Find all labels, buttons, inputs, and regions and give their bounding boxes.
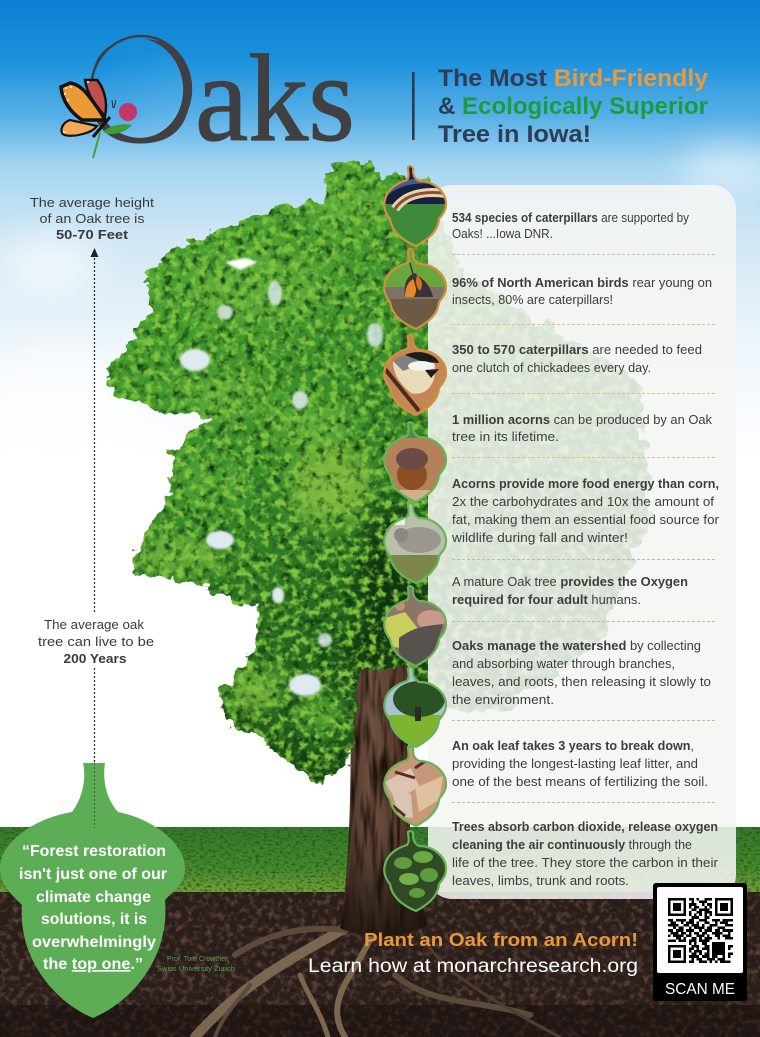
fact: carbon: leaves, limbs, trunk and roots. bbox=[452, 874, 629, 888]
quote text: climate change bbox=[36, 889, 151, 906]
fact: watershed: and absorbing water through branches, bbox=[452, 657, 675, 671]
fact: food energy: fat, making them an essential food source for bbox=[452, 513, 719, 527]
heading: tagline bbox=[438, 65, 709, 148]
heading: tagline: & Ecologically Superior bbox=[438, 93, 708, 120]
fact: carbon bbox=[452, 820, 718, 888]
icon: seedlings acorn bbox=[383, 830, 448, 912]
fact: food energy bbox=[451, 477, 719, 545]
QR modules bbox=[668, 899, 733, 962]
quote text: isn't just one of our bbox=[19, 866, 167, 883]
fact: watershed: leaves, and roots, then releasing it slowly to bbox=[452, 675, 711, 689]
fact: food energy: Acorns provide more food energy than corn, bbox=[452, 477, 719, 491]
QR label: SCAN ME bbox=[665, 981, 735, 998]
icon: squirrel acorn bbox=[383, 502, 448, 584]
divider bbox=[412, 72, 415, 140]
icon: butterfly and flower bbox=[61, 80, 137, 158]
lifespan note: 200 Years bbox=[64, 652, 127, 666]
fact: leaf litter: one of the best means of fertilizing the soil. bbox=[452, 775, 708, 789]
fact: caterpillars: 534 species of caterpillars are supported by bbox=[452, 211, 690, 225]
quote text: “Forest restoration bbox=[22, 843, 166, 860]
fact: carbon: life of the tree. They store the carbon in their bbox=[452, 856, 718, 870]
quote text: solutions, it is bbox=[41, 911, 147, 928]
fact: birds bbox=[452, 276, 712, 307]
fact: caterpillars: Oaks! ...Iowa DNR. bbox=[452, 227, 553, 241]
callout: acorn quote bbox=[0, 763, 185, 1018]
fact: carbon: Trees absorb carbon dioxide, release oxygen bbox=[452, 820, 718, 834]
quote attribution bbox=[157, 956, 235, 973]
tree roots bbox=[195, 925, 560, 1037]
call to action bbox=[308, 929, 638, 977]
lifespan note: tree can live to be bbox=[38, 635, 154, 649]
height note: The average height bbox=[30, 196, 155, 210]
fact: chickadees bbox=[452, 343, 702, 375]
quote text bbox=[19, 843, 167, 973]
logo wordmark bbox=[84, 3, 355, 176]
ground: grass strip bbox=[0, 827, 760, 895]
lifespan note: The average oak bbox=[44, 618, 145, 632]
logo wordmark: aks bbox=[195, 30, 355, 167]
lifespan note bbox=[38, 618, 154, 666]
quote text: the top one.” bbox=[43, 956, 143, 973]
fact: leaf litter bbox=[452, 739, 708, 789]
height note bbox=[30, 196, 155, 242]
heading: tagline: Tree in Iowa! bbox=[438, 121, 591, 148]
fact: watershed bbox=[452, 639, 711, 707]
fact: birds: insects, 80% are caterpillars! bbox=[452, 293, 613, 307]
fact: acorns count bbox=[452, 413, 713, 444]
fact: oxygen bbox=[452, 575, 688, 607]
logo wordmark: O bbox=[84, 3, 197, 176]
fact: acorns count: 1 million acorns can be produced by an Oak bbox=[452, 413, 713, 427]
header: Oaks logo bbox=[61, 3, 355, 176]
icon: acorn photo bbox=[383, 421, 448, 503]
tree foliage bbox=[110, 160, 650, 783]
fact: chickadees: one clutch of chickadees every day. bbox=[452, 361, 651, 375]
quote attribution: Prof. Tom Crowther, bbox=[167, 956, 229, 963]
heading: tagline: The Most Bird-Friendly bbox=[438, 65, 709, 92]
icon: nest acorn bbox=[383, 248, 448, 330]
fact: food energy: 2x the carbohydrates and 10x the amount of bbox=[452, 495, 715, 509]
icon: people acorn bbox=[383, 585, 448, 668]
dotted line in acorn bbox=[94, 763, 96, 828]
quote text: overwhelmingly bbox=[32, 934, 156, 951]
fact: leaf litter: providing the longest-lasting leaf litter, and bbox=[452, 757, 698, 771]
dotted line: lifespan bbox=[94, 668, 96, 830]
fact: food energy: wildlife during fall and winter! bbox=[451, 531, 628, 545]
ground: soil bbox=[0, 892, 760, 1037]
fact: chickadees: 350 to 570 caterpillars are needed to feed bbox=[452, 343, 702, 357]
fact: oxygen: required for four adult humans. bbox=[452, 593, 641, 607]
sky gaps in foliage bbox=[180, 258, 383, 696]
icon: caterpillar acorn bbox=[383, 165, 448, 248]
acorn shape bbox=[0, 763, 185, 1018]
facts text bbox=[451, 211, 719, 888]
fact: leaf litter: An oak leaf takes 3 years to break down, bbox=[452, 739, 694, 753]
fact: watershed: the environment. bbox=[452, 693, 554, 707]
quote attribution: Swiss University Zurich bbox=[157, 966, 235, 973]
height note: 50-70 Feet bbox=[56, 228, 129, 242]
icon: leaf litter acorn bbox=[383, 745, 448, 828]
height note: of an Oak tree is bbox=[40, 212, 144, 226]
icon: tree on lawn acorn bbox=[383, 666, 448, 748]
fact: oxygen: A mature Oak tree provides the Oxygen bbox=[452, 575, 688, 589]
fact: carbon: cleaning the air continuously through the bbox=[452, 838, 692, 852]
panel: facts background bbox=[428, 185, 736, 899]
QR code bbox=[653, 883, 747, 1001]
tree trunk bbox=[340, 660, 428, 937]
fact: acorns count: tree in its lifetime. bbox=[452, 430, 559, 444]
fact: watershed: Oaks manage the watershed by collecting bbox=[452, 639, 701, 653]
call to action: Plant an Oak from an Acorn! bbox=[364, 929, 638, 950]
fact: birds: 96% of North American birds rear young on bbox=[452, 276, 712, 290]
call to action: Learn how at monarchresearch.org bbox=[308, 956, 638, 977]
arrow: tree height bbox=[90, 248, 98, 612]
fact: caterpillars bbox=[452, 211, 690, 241]
icon: chickadee acorn bbox=[383, 334, 448, 416]
